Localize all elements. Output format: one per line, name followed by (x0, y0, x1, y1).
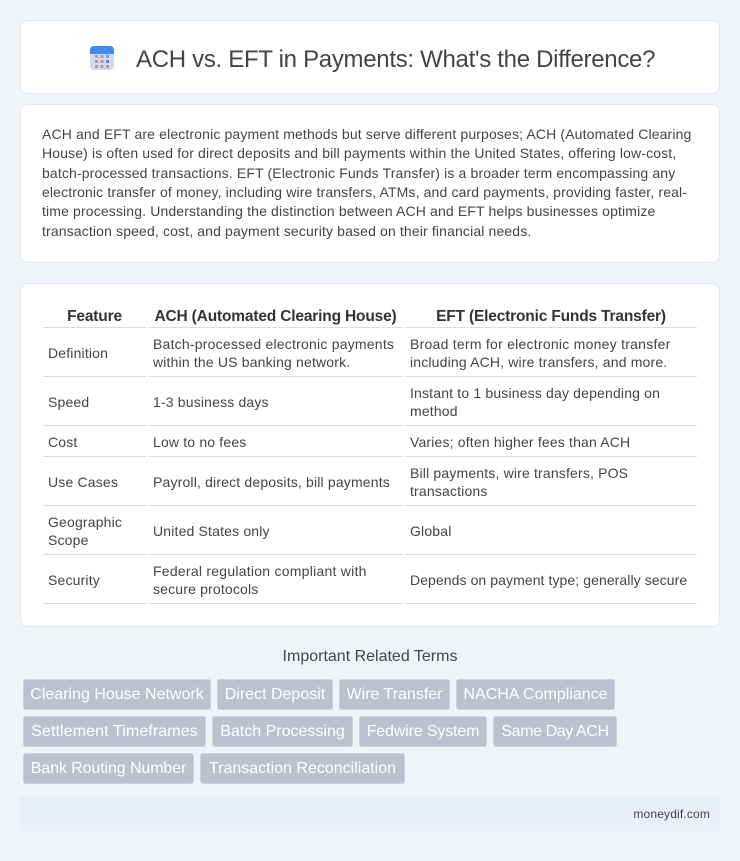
tag: Batch Processing (220, 723, 345, 740)
tag (359, 716, 487, 747)
tag list: related terms (23, 679, 617, 784)
table header (67, 308, 666, 325)
text block: intro: electronic transfer of money, including wire transfers, ATMs, and card payments, providing faster, real- (42, 184, 687, 200)
tag (212, 716, 353, 747)
tag: Direct Deposit (225, 686, 325, 703)
row: security (48, 563, 687, 597)
row: cost: Low to no fees (153, 434, 246, 450)
row: geographic scope: Global (410, 523, 452, 539)
row: geographic scope: Scope (48, 532, 89, 548)
tag (23, 753, 194, 784)
panel: title header (20, 20, 720, 94)
row: use cases (48, 465, 628, 499)
icon: calendar (90, 46, 114, 70)
heading: related terms: Important Related Terms (283, 648, 457, 665)
text block: intro: ACH and EFT are electronic payment methods but serve different purposes; ACH (Automated Clearing (42, 126, 691, 142)
row: speed: Instant to 1 business day depending on (410, 385, 660, 401)
row: definition: Broad term for electronic money transfer (410, 336, 671, 352)
row: security: secure protocols (153, 581, 258, 597)
row: geographic scope (48, 514, 452, 548)
text block: intro: batch-processed transactions. EFT (Electronic Funds Transfer) is a broader term encompassing any (42, 165, 675, 181)
row: geographic scope: United States only (153, 523, 270, 539)
tag (217, 679, 333, 710)
row: security: Federal regulation compliant with (153, 563, 367, 579)
text block: intro: transaction speed, cost, and payment security based on their financial needs. (42, 223, 531, 239)
row: definition: including ACH, wire transfers, and more. (410, 354, 667, 370)
footer: source: moneydif.com (633, 807, 710, 821)
table header: Feature (67, 308, 122, 325)
row: speed: method (410, 403, 458, 419)
tag: Wire Transfer (346, 686, 442, 703)
tag (493, 716, 617, 747)
row: use cases: Use Cases (48, 474, 118, 490)
tag (339, 679, 450, 710)
tag: Fedwire System (367, 723, 479, 740)
row: use cases: transactions (410, 483, 488, 499)
row: use cases: Payroll, direct deposits, bill payments (153, 474, 390, 490)
panel: intro paragraph (20, 104, 720, 263)
tag: Settlement Timeframes (31, 723, 198, 740)
row: definition (48, 336, 671, 370)
row: speed: Speed (48, 394, 89, 410)
row: speed (48, 385, 660, 419)
tag: Same Day ACH (501, 723, 609, 740)
row: definition: Batch-processed electronic payments (153, 336, 394, 352)
text block: intro: House) is often used for direct deposits and bill payments within the United States, offering low-cost, (42, 145, 676, 161)
tag: Clearing House Network (30, 686, 204, 703)
tag: Transaction Reconciliation (209, 760, 396, 777)
table header: EFT (Electronic Funds Transfer) (436, 308, 666, 325)
row: definition: within the US banking network. (153, 354, 350, 370)
text block: intro (42, 126, 691, 239)
row: security: Depends on payment type; generally secure (410, 572, 687, 588)
tag (23, 679, 211, 710)
tag (200, 753, 405, 784)
title: ACH vs. EFT in Payments: What's the Difference? (136, 46, 655, 73)
panel: comparison table (20, 283, 720, 627)
tag: NACHA Compliance (463, 686, 608, 703)
tag (23, 716, 206, 747)
row: cost: Cost (48, 434, 77, 450)
row: cost: Varies; often higher fees than ACH (410, 434, 630, 450)
tag: Bank Routing Number (31, 760, 186, 777)
row: security: Security (48, 572, 100, 588)
row: definition: Definition (48, 345, 108, 361)
row: geographic scope: Geographic (48, 514, 122, 530)
tag (456, 679, 615, 710)
row: speed: 1-3 business days (153, 394, 269, 410)
text block: intro: time processing. Understanding the distinction between ACH and EFT helps businesses optimize (42, 203, 655, 219)
table header: ACH (Automated Clearing House) (154, 308, 397, 325)
row: cost (48, 434, 630, 450)
row: use cases: Bill payments, wire transfers, POS (410, 465, 628, 481)
footer bar (20, 797, 720, 831)
